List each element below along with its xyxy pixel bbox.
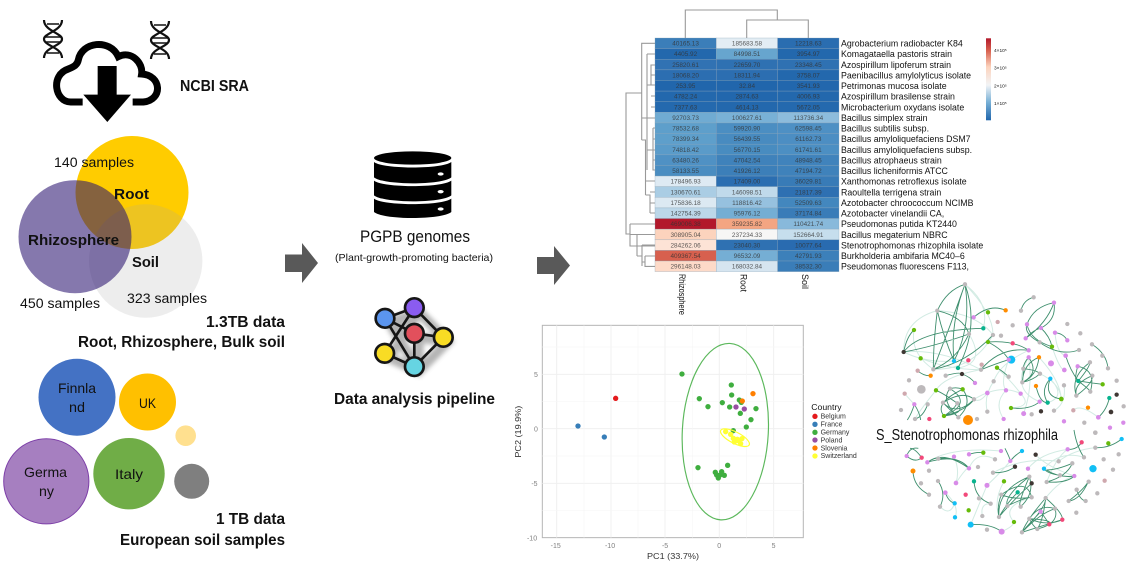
heatmap: 178496.93 [670, 179, 701, 186]
heatmap: 78399.34 [672, 136, 699, 143]
heatmap [655, 38, 839, 272]
heatmap: 2874.63 [735, 94, 759, 101]
icon: cloud download [57, 44, 158, 122]
heatmap: 21817.39 [795, 189, 822, 196]
heatmap: 23348.45 [795, 62, 822, 69]
heatmap: 308905.04 [670, 232, 701, 239]
heatmap: 42791.93 [795, 253, 822, 260]
heatmap: 7377.63 [674, 104, 698, 111]
heatmap: 100627.61 [732, 115, 763, 122]
heatmap row labels: Azospirillum lipoferum strain [841, 60, 951, 70]
heatmap: 4405.92 [674, 51, 698, 58]
heatmap: 469006.38 [670, 221, 701, 228]
heatmap: 56439.55 [734, 136, 761, 143]
heatmap: 18311.94 [734, 72, 761, 80]
PCA scatter plot: -10 [527, 535, 537, 542]
heatmap row labels: Paenibacillus amylolyticus isolate [841, 70, 971, 80]
venn diagram: Root [114, 186, 149, 203]
heatmap: 40165.13 [672, 41, 699, 48]
venn diagram: 323 samples [127, 291, 207, 306]
text: 1 TB data: 1 TB data [216, 511, 285, 528]
venn diagram: Rhizosphere [28, 232, 119, 249]
bubble chart: European countries: ny [39, 483, 54, 499]
text: PGPB genomes [335, 228, 493, 264]
heatmap: 142754.39 [670, 211, 701, 218]
heatmap: 253.95 [676, 83, 696, 90]
heatmap colour legend: 2×10⁵ [994, 84, 1007, 90]
heatmap: 92703.73 [672, 115, 699, 122]
heatmap dendrogram: top [685, 10, 808, 38]
PCA scatter plot: Country [811, 402, 842, 412]
PCA scatter plot: -5 [662, 543, 668, 550]
PCA scatter plot: -10 [605, 543, 615, 550]
bubble chart: European countries [4, 359, 209, 524]
heatmap row labels: Bacillus amyloliquefaciens DSM7 [841, 134, 971, 144]
icon: neural network [375, 298, 453, 376]
heatmap: 52509.63 [795, 200, 822, 207]
icon: database [374, 151, 451, 218]
bubble chart: European countries: nd [69, 399, 85, 415]
heatmap row labels: Azotobacter vinelandii CA, [841, 209, 944, 219]
heatmap row labels: Bacillus megaterium NBRC [841, 230, 948, 240]
PCA scatter plot: Slovenia [821, 445, 848, 452]
heatmap: 359235.82 [732, 221, 763, 228]
heatmap: 296148.03 [670, 264, 701, 271]
icon: DNA right [151, 21, 169, 59]
heatmap: 41926.12 [734, 168, 761, 175]
heatmap: 17409.00 [734, 179, 761, 186]
heatmap dendrogram: left [626, 43, 655, 266]
heatmap row labels: Xanthomonas retroflexus isolate [841, 177, 967, 187]
heatmap row labels: Bacillus amyloliquefaciens subsp. [841, 145, 972, 155]
heatmap row labels: Komagataella pastoris strain [841, 49, 952, 59]
heatmap: 168032.84 [732, 264, 763, 271]
heatmap column labels: Root [738, 274, 748, 293]
heatmap: 78532.68 [672, 126, 699, 133]
bubble chart: European countries: UK [139, 395, 157, 411]
heatmap: 130670.61 [670, 189, 701, 196]
heatmap row labels: Microbacterium oxydans isolate [841, 102, 964, 112]
venn diagram: 450 samples [20, 296, 100, 311]
heatmap: 47042.54 [734, 158, 761, 164]
PCA scatter plot: Germany [821, 430, 850, 437]
heatmap: 84998.51 [734, 51, 761, 58]
heatmap: 25820.61 [672, 62, 699, 69]
heatmap row labels: Agrobacterium radiobacter K84 [841, 39, 963, 49]
heatmap row labels [841, 39, 983, 272]
heading: NCBI SRA: NCBI SRA [180, 78, 249, 95]
heatmap: 32.84 [739, 83, 755, 90]
heatmap column labels [677, 274, 810, 315]
PCA scatter plot: 0 [717, 543, 721, 550]
heatmap: 146098.51 [732, 189, 763, 196]
heatmap row labels: Bacillus atrophaeus strain [841, 156, 942, 166]
heatmap: 38532.30 [795, 264, 822, 271]
text: 1.3TB data: 1.3TB data [206, 314, 285, 331]
heatmap: 56770.15 [734, 147, 761, 154]
heatmap: 409367.54 [670, 253, 701, 260]
heatmap row labels: Pseudomonas putida KT2440 [841, 219, 957, 229]
heatmap: 5672.05 [797, 104, 820, 111]
arrow: to genomes [285, 243, 318, 283]
heatmap: 58133.55 [672, 168, 699, 175]
PCA scatter plot: Switzerland [821, 453, 857, 460]
heatmap: 110421.74 [793, 221, 824, 228]
heatmap: 48948.45 [795, 158, 822, 164]
heatmap: 175836.18 [670, 200, 701, 207]
PCA scatter plot: -5 [531, 481, 538, 488]
heatmap: 61162.73 [795, 136, 822, 143]
PCA scatter plot: PC2 (19.9%) [513, 405, 523, 458]
heatmap colour legend [986, 38, 1007, 120]
PCA scatter plot: Poland [821, 437, 842, 444]
PCA scatter plot: France [821, 422, 842, 429]
heatmap row labels: Azospirillum brasilense strain [841, 92, 955, 102]
heatmap: 4782.24 [674, 94, 698, 101]
text: PGPB genomes: PGPB genomes [360, 228, 470, 246]
heatmap: 10077.64 [795, 242, 822, 249]
heatmap row labels: Pseudomonas fluorescens F113, [841, 262, 969, 272]
heatmap: 37174.84 [795, 211, 822, 218]
heatmap: 74818.42 [672, 147, 699, 154]
heatmap: 47194.72 [795, 168, 822, 175]
PCA scatter plot: 0 [534, 426, 538, 433]
text: PGPB genomes: (Plant-growth-promoting bacteria) [335, 252, 493, 264]
heatmap: 237234.33 [732, 232, 763, 239]
heatmap colour legend: 4×10⁵ [994, 48, 1007, 54]
heatmap row labels: Bacillus subtilis subsp. [841, 124, 929, 134]
heatmap: 95976.12 [734, 211, 761, 218]
heatmap: 185683.58 [732, 41, 763, 48]
venn diagram [18, 136, 207, 318]
text: 1.3TB data [78, 314, 285, 351]
venn diagram: 140 samples [54, 155, 134, 170]
heatmap: 3758.07 [797, 72, 820, 80]
heatmap row labels: Petrimonas mucosa isolate [841, 81, 947, 91]
text: 1 TB data [120, 511, 285, 549]
heatmap row labels: Raoultella terrigena strain [841, 187, 941, 197]
heatmap: 113736.34 [793, 115, 824, 122]
heatmap: 23040.30 [734, 242, 761, 249]
heatmap: 152664.91 [793, 232, 824, 239]
PCA scatter plot: Belgium [821, 414, 846, 421]
heatmap: 284262.06 [670, 242, 701, 249]
PCA scatter plot: -15 [551, 543, 561, 550]
PCA scatter plot: 5 [772, 543, 776, 550]
heatmap: 96532.09 [734, 253, 761, 260]
heatmap: 61741.61 [795, 147, 822, 154]
PCA scatter plot: 5 [534, 372, 538, 379]
heatmap row labels: Burkholderia ambifaria MC40–6 [841, 251, 965, 261]
heatmap column labels: Rhizosphere [677, 274, 687, 315]
heatmap colour legend: 3×10⁵ [994, 66, 1007, 72]
heatmap: 36029.81 [795, 179, 822, 186]
text: 1.3TB data: Root, Rhizosphere, Bulk soil [78, 334, 285, 351]
text: 1 TB data: European soil samples [120, 532, 285, 549]
heatmap: 4614.13 [735, 104, 759, 111]
heatmap: 62598.45 [795, 126, 822, 133]
heatmap colour legend: 1×10⁵ [994, 101, 1007, 107]
bubble chart: European countries: Germa [24, 464, 67, 480]
heatmap row labels: Stenotrophomonas rhizophila isolate [841, 240, 983, 250]
heatmap: 22659.70 [734, 62, 761, 69]
heatmap: 63480.26 [672, 158, 699, 164]
icon: DNA left [44, 20, 62, 58]
heatmap row labels: Bacillus licheniformis ATCC [841, 166, 949, 176]
heatmap: 3954.97 [797, 51, 820, 58]
venn diagram: Soil [132, 254, 159, 271]
heatmap row labels: Azotobacter chroococcum NCIMB [841, 198, 974, 208]
heatmap: 4006.93 [797, 94, 820, 101]
heatmap: 118816.42 [732, 200, 762, 207]
PCA scatter plot: PC1 (33.7%) [647, 551, 699, 561]
heatmap: 18068.20 [672, 72, 699, 80]
heatmap row labels: Bacillus simplex strain [841, 113, 928, 123]
network graph: top half [899, 282, 1126, 425]
bubble chart: European countries: Italy [115, 466, 143, 482]
label: S_Stenotrophomonas rhizophila: S_Stenotrophomonas rhizophila [876, 427, 1058, 444]
network graph: bottom half [904, 419, 1125, 535]
arrow: to heatmap [537, 246, 570, 285]
PCA scatter plot [513, 325, 857, 561]
text: Data analysis pipeline: Data analysis pipeline [334, 391, 495, 408]
heatmap: 59920.90 [734, 126, 761, 133]
bubble chart: European countries: Finnla [58, 380, 96, 396]
heatmap column labels: Soil [800, 274, 810, 289]
heatmap: 12218.63 [795, 41, 822, 48]
heatmap: 3541.93 [797, 83, 820, 90]
